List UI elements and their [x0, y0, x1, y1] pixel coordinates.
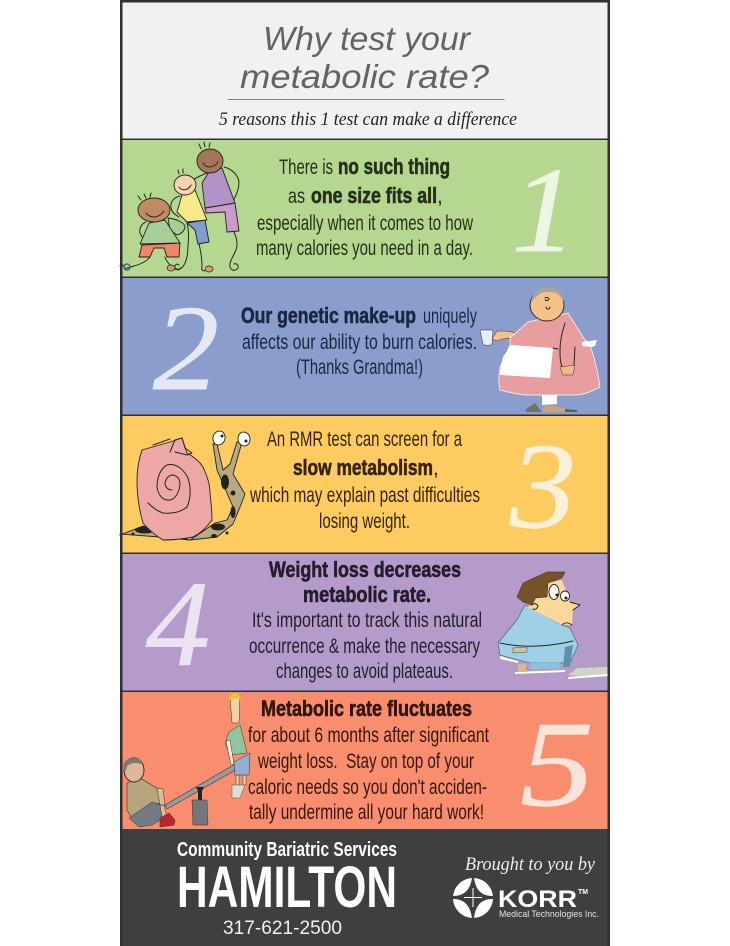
panel: reason 4 [120, 553, 610, 692]
reason 5 text: for about 6 months after significant [248, 724, 489, 747]
KORR logo: TM [578, 889, 588, 896]
illustration: three children [120, 142, 239, 272]
reason 2 text: (Thanks Grandma!) [296, 356, 423, 379]
panel: reason 2 [120, 277, 610, 416]
numeral 5: 5 [520, 697, 594, 832]
reason 1 text: many calories you need in a day. [256, 237, 473, 260]
reason 5 text: tally undermine all your hard work! [249, 801, 484, 824]
organisation name: Community Bariatric Services [177, 839, 397, 861]
reason 3 text [249, 428, 480, 533]
reason 1 text: There is [279, 156, 333, 179]
reason 4 text: metabolic rate. [303, 582, 431, 607]
illustration: man on scale [498, 572, 608, 679]
reason 4 text: It's important to track this natural [252, 609, 482, 632]
numeral 3: 3 [509, 419, 576, 554]
reason 2 text: uniquely [423, 305, 477, 328]
reason 4 text: occurrence & make the necessary [249, 635, 480, 658]
reason 1 text: , [437, 185, 443, 208]
KORR logo: KORR [498, 886, 577, 913]
title [240, 20, 490, 95]
illustration: snail [120, 430, 251, 540]
title: Why test your [263, 20, 472, 57]
reason 1 text: as [288, 185, 305, 208]
purple shirt [202, 168, 235, 208]
panel: title [120, 1, 610, 140]
illustration: seesaw with two men [123, 693, 250, 827]
reason 4 text [249, 557, 482, 683]
reason 3 text: , [433, 457, 439, 480]
pants [205, 203, 239, 232]
KORR logo [453, 878, 599, 920]
reason 3 text: losing weight. [319, 510, 410, 533]
numeral 4: 4 [146, 557, 210, 692]
reason 1 text: one size fits all [311, 183, 437, 208]
subtitle: 5 reasons this 1 test can make a difference [219, 109, 517, 130]
brought to you by: Brought to you by [465, 854, 596, 875]
reason 2 text: Our genetic make-up [241, 303, 416, 328]
title: metabolic rate? [240, 58, 490, 95]
reason 2 text [241, 303, 477, 379]
numeral 1: 1 [512, 143, 576, 278]
Hamilton wordmark: HAMILTON [177, 855, 397, 920]
reason 4 text: changes to avoid plateaus. [276, 660, 453, 683]
panel: reason 5 [120, 691, 610, 832]
reason 5 text: caloric needs so you don't acciden- [248, 776, 487, 799]
reason 5 text: Metabolic rate fluctuates [261, 696, 472, 721]
reason 1 text [256, 154, 474, 260]
reason 5 text: weight loss. Stay on top of your [257, 750, 474, 773]
reason 3 text: slow metabolism [293, 455, 433, 480]
numeral 2: 2 [153, 281, 219, 416]
panel: reason 1 [120, 140, 610, 278]
KORR logo: Medical Technologies Inc. [499, 909, 599, 920]
reason 5 text [248, 696, 489, 824]
panel: reason 3 [120, 415, 610, 554]
reason 4 text: Weight loss decreases [269, 557, 461, 582]
phone number: 317-621-2500 [223, 918, 342, 939]
reason 3 text: which may explain past difficulties [249, 484, 480, 507]
panel: sponsor footer [120, 829, 610, 946]
reason 1 text: no such thing [338, 154, 450, 179]
illustration: grandma with teacup [480, 287, 600, 412]
reason 3 text: An RMR test can screen for a [267, 428, 462, 451]
reason 1 text: especially when it comes to how [257, 212, 474, 235]
reason 2 text: affects our ability to burn calories. [242, 331, 477, 354]
